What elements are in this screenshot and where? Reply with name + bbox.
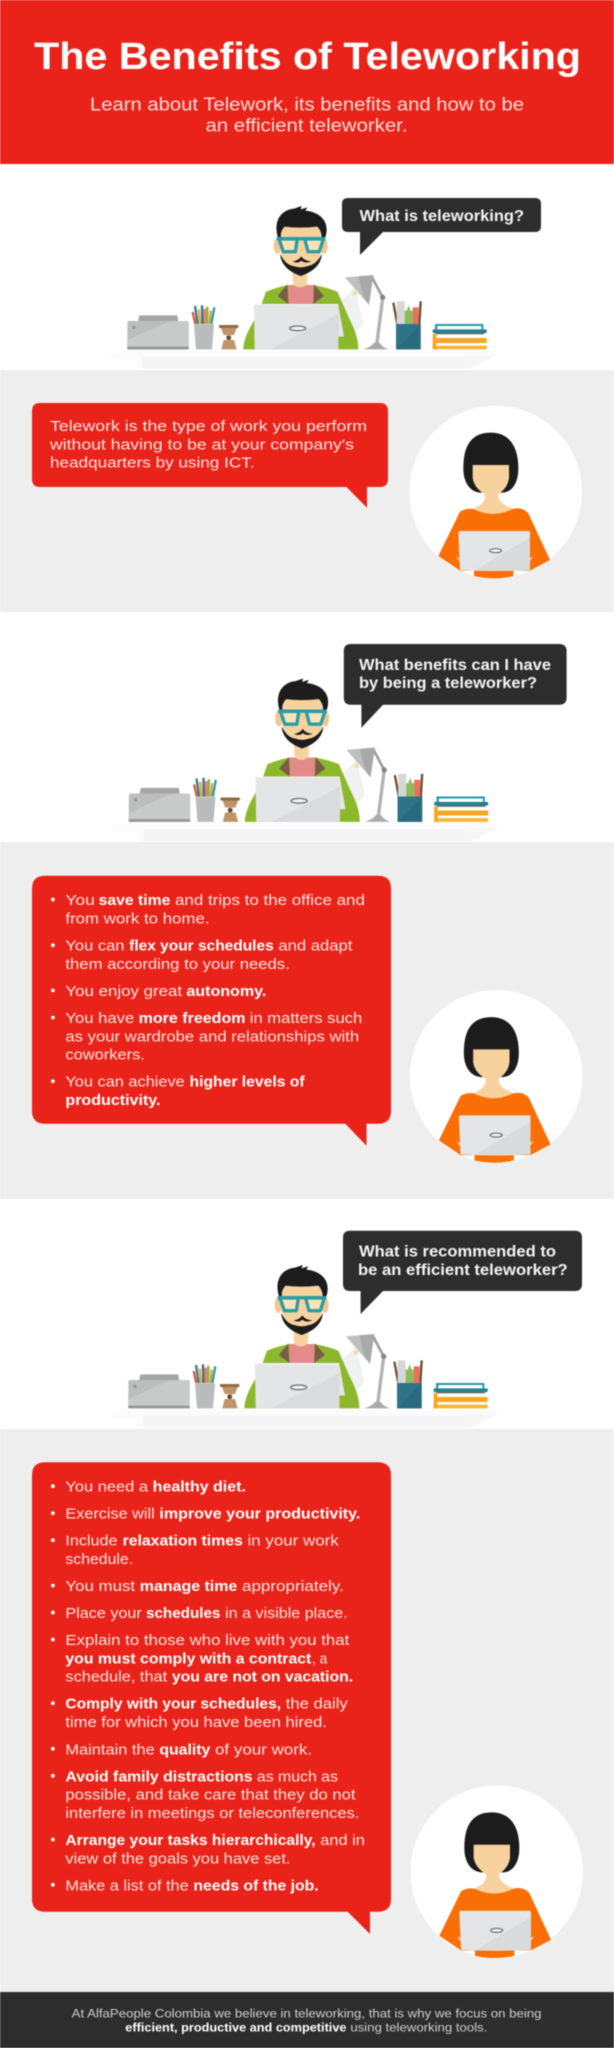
speech bubble: What benefits can I have: by being a teleworker?: [359, 675, 537, 692]
footer text: At AlfaPeople Colombia we believe in teleworking, that is why we focus on being: [72, 2006, 542, 2020]
benefits text: flex your schedules: [129, 938, 274, 955]
recommendations text: Make a list of the: [65, 1877, 189, 1894]
speech bubble: What is teleworking?: [342, 198, 541, 255]
recommendations text: improve your productivity.: [159, 1506, 360, 1523]
recommendations text: and in: [320, 1832, 365, 1849]
definition text: [49, 418, 367, 472]
recommendations text: schedules: [146, 1605, 220, 1622]
ears: [274, 238, 281, 254]
benefits text: You enjoy great: [65, 983, 183, 1000]
panel: recommendations list: [32, 1462, 391, 1934]
definition text: headquarters by using ICT.: [50, 455, 254, 472]
recommendations text: in your work: [248, 1533, 339, 1550]
white circle: [409, 406, 582, 578]
moustache: [292, 256, 311, 263]
recommendations text: the daily: [286, 1696, 348, 1713]
benefits text: You can: [65, 938, 124, 955]
subtitle: Learn about Telework, its benefits and how to be: [90, 94, 524, 114]
illustration: man at desk 2: [112, 678, 499, 841]
benefits text: and adapt: [278, 938, 353, 955]
recommendations text: as much as: [257, 1768, 338, 1785]
benefits text: as your wardrobe and relationships with: [65, 1028, 359, 1045]
glasses: [277, 239, 325, 252]
laptop: [254, 304, 344, 349]
neck: [293, 268, 307, 287]
recommendations text: You must: [65, 1578, 136, 1595]
icon: coffee cup: [219, 325, 238, 349]
definition text: Telework is the type of work you perform: [50, 418, 367, 435]
benefits text: save time: [99, 892, 170, 909]
red speech bubble: [32, 876, 391, 1146]
footer text: [72, 2006, 542, 2034]
man: [243, 206, 358, 349]
jacket: [243, 285, 358, 349]
speech bubble: What is teleworking?: What is teleworking?: [360, 208, 524, 225]
recommendations text: Maintain the: [65, 1741, 155, 1758]
benefits text: them according to your needs.: [65, 956, 290, 973]
recommendations text: Exercise will: [65, 1506, 155, 1523]
benefits text: [65, 892, 365, 1109]
recommendations text: of your work.: [215, 1741, 312, 1758]
hair: [463, 433, 518, 493]
subtitle: [90, 94, 524, 136]
recommendations text: in a visible place.: [225, 1605, 348, 1622]
recommendations text: you must comply with a contract: [65, 1650, 311, 1667]
recommendations text: relaxation times: [123, 1533, 243, 1550]
recommendations text: view of the goals you have set.: [65, 1850, 291, 1867]
recommendations text: healthy diet.: [153, 1479, 246, 1496]
definition text: without having to be at your company's: [49, 436, 354, 454]
recommendations text: Place your: [65, 1605, 142, 1622]
benefits text: higher levels of: [190, 1074, 306, 1091]
icon: pencil cup: [193, 305, 214, 349]
icon: pen holder: [393, 301, 421, 349]
benefits text: autonomy.: [186, 983, 266, 1000]
benefits text: in matters such: [250, 1010, 362, 1027]
recommendations text: Include: [65, 1533, 118, 1550]
panel: definition of telework: [32, 403, 388, 508]
speech bubble: What is recommended: [343, 1231, 582, 1314]
illustration: man at desk 1: [110, 206, 497, 369]
orange top: [438, 508, 550, 571]
benefits text: coworkers.: [65, 1047, 145, 1064]
footer text: using teleworking tools.: [350, 2020, 487, 2034]
benefits text: You: [65, 892, 95, 909]
recommendations text: , a: [312, 1650, 328, 1667]
benefits text: productivity.: [65, 1092, 160, 1109]
recommendations text: Avoid family distractions: [65, 1768, 253, 1785]
benefits text: You have: [65, 1010, 134, 1027]
bullet marks: [51, 898, 55, 1083]
speech bubble: What is recommended: be an efficient teleworker?: [358, 1262, 568, 1279]
recommendations text: Arrange your tasks hierarchically,: [65, 1832, 316, 1849]
recommendations text: interfere in meetings or teleconferences.: [65, 1805, 359, 1822]
benefits text: more freedom: [139, 1010, 246, 1027]
illustration: man at desk 3: [111, 1265, 498, 1428]
red speech bubble: [32, 403, 388, 508]
recommendations text: schedule.: [65, 1551, 133, 1568]
icon: printer: [127, 315, 189, 349]
recommendations text: Explain to those who live with you that: [65, 1632, 350, 1649]
illustration: woman in circle 2: [410, 990, 582, 1163]
lapels: [278, 284, 324, 304]
speech bubble: What is recommended: What is recommended to: [359, 1244, 556, 1261]
benefits text: and trips to the office and: [175, 892, 365, 909]
beard: [280, 254, 322, 276]
grey section backgrounds: [0, 370, 614, 1992]
recommendations text: schedule, that: [65, 1669, 168, 1686]
recommendations text: possible, and take care that they do not: [65, 1787, 356, 1804]
shirt: [288, 285, 313, 307]
recommendations text: needs of the job.: [193, 1877, 319, 1894]
recommendations text: quality: [159, 1741, 211, 1758]
speech bubble: What benefits can I have: What benefits can I have: [359, 657, 551, 674]
recommendations text: appropriately.: [242, 1578, 344, 1595]
speech bubble: What benefits can I have: [344, 644, 567, 728]
red speech bubble: [32, 1462, 391, 1934]
recommendations text: you are not on vacation.: [172, 1669, 353, 1686]
face and neck: [472, 465, 515, 517]
face: [281, 223, 321, 274]
icon: books: [433, 324, 487, 349]
recommendations text: time for which you have been hired.: [65, 1714, 327, 1731]
recommendations text: [65, 1479, 365, 1894]
recommendations text: Comply with your schedules,: [65, 1696, 281, 1713]
desk: [110, 351, 497, 369]
benefits text: from work to home.: [65, 910, 210, 927]
header banner: [0, 0, 614, 164]
title: The Benefits of Teleworking: [34, 36, 581, 78]
recommendations text: You need a: [65, 1479, 149, 1496]
footer: [0, 1992, 614, 2048]
bullet marks: [51, 1484, 55, 1887]
laptop: [458, 531, 530, 571]
illustration: woman in circle 1: [409, 406, 582, 578]
panel: benefits list: [32, 876, 391, 1146]
icon: desk lamp: [340, 275, 389, 349]
recommendations text: manage time: [140, 1578, 237, 1595]
footer text: efficient, productive and competitive: [125, 2020, 347, 2034]
benefits text: You can achieve: [65, 1074, 185, 1091]
illustration: woman in circle 3: [410, 1785, 583, 1958]
subtitle: an efficient teleworker.: [206, 116, 408, 136]
hair: [276, 206, 327, 239]
